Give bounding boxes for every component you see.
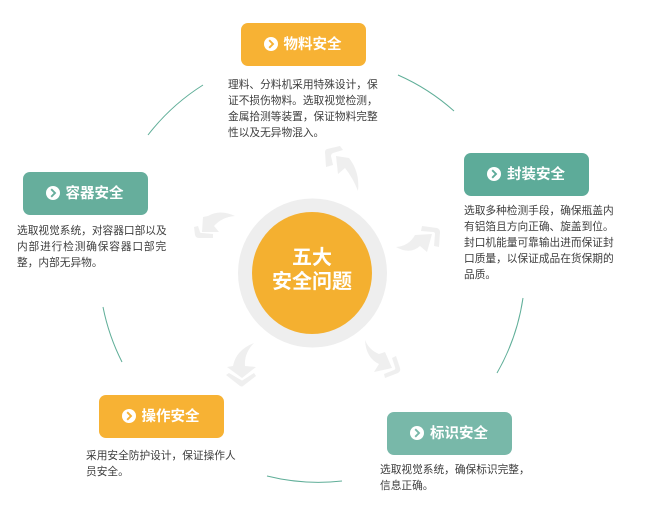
- text: operation safety: 采用安全防护设计，保证操作人: [86, 450, 236, 462]
- text: operation safety: [86, 450, 236, 478]
- text: container safety: 选取视觉系统，对容器口部以及: [17, 225, 167, 237]
- arc: bottom left: [103, 307, 122, 362]
- text: labeling safety: [380, 464, 530, 492]
- button: operation safety: [98, 395, 224, 438]
- arrow: bottom right: [365, 340, 400, 378]
- arrow: right: [396, 226, 440, 252]
- center circle title: 安全问题: [272, 271, 352, 293]
- arrow: top: [325, 146, 358, 191]
- center ring: [238, 198, 387, 348]
- text: container safety: [17, 224, 167, 269]
- arc: top right: [398, 75, 454, 111]
- arc: bottom: [267, 476, 342, 482]
- button: material safety: 物料安全: [284, 37, 342, 53]
- text: labeling safety: 信息正确。: [380, 480, 433, 492]
- text: container safety: 内部进行检测确保容器口部完: [17, 241, 167, 253]
- button: container safety: [22, 172, 148, 215]
- text: labeling safety: 选取视觉系统，确保标识完整，: [380, 464, 530, 476]
- text: packaging safety: 口质量，以保证成品在货保期的: [464, 253, 614, 265]
- text: packaging safety: [464, 204, 614, 281]
- text: packaging safety: 品质。: [464, 269, 496, 281]
- text: material safety: [228, 78, 378, 139]
- text: material safety: 性以及无异物混入。: [228, 127, 324, 139]
- text: packaging safety: 有铝箔且方向正确、旋盖到位。: [464, 221, 614, 233]
- button: packaging safety: [464, 153, 589, 196]
- text: operation safety: 员安全。: [86, 466, 129, 478]
- text: material safety: 理料、分料机采用特殊设计，保: [228, 79, 378, 91]
- center circle title: 五大: [292, 247, 332, 269]
- text: packaging safety: 选取多种检测手段，确保瓶盖内: [464, 205, 614, 217]
- button: container safety: 容器安全: [66, 186, 124, 202]
- center circle title: [252, 212, 372, 334]
- button: operation safety: 操作安全: [142, 409, 200, 425]
- button: packaging safety: 封装安全: [507, 167, 565, 183]
- button: labeling safety: 标识安全: [430, 426, 488, 442]
- arc: right: [497, 298, 523, 373]
- text: material safety: 金属拾测等装置，保证物料完整: [228, 111, 378, 123]
- text: packaging safety: 封口机能量可靠输出进而保证封: [464, 237, 614, 249]
- button: labeling safety: [387, 412, 512, 455]
- text: container safety: 整，内部无异物。: [17, 257, 103, 269]
- arrow: bottom left: [226, 343, 256, 386]
- text: material safety: 证不损伤物料。选取视觉检测，: [228, 95, 378, 107]
- button: material safety: [240, 23, 366, 66]
- arc: top left: [148, 85, 203, 135]
- arrow: left: [194, 212, 235, 238]
